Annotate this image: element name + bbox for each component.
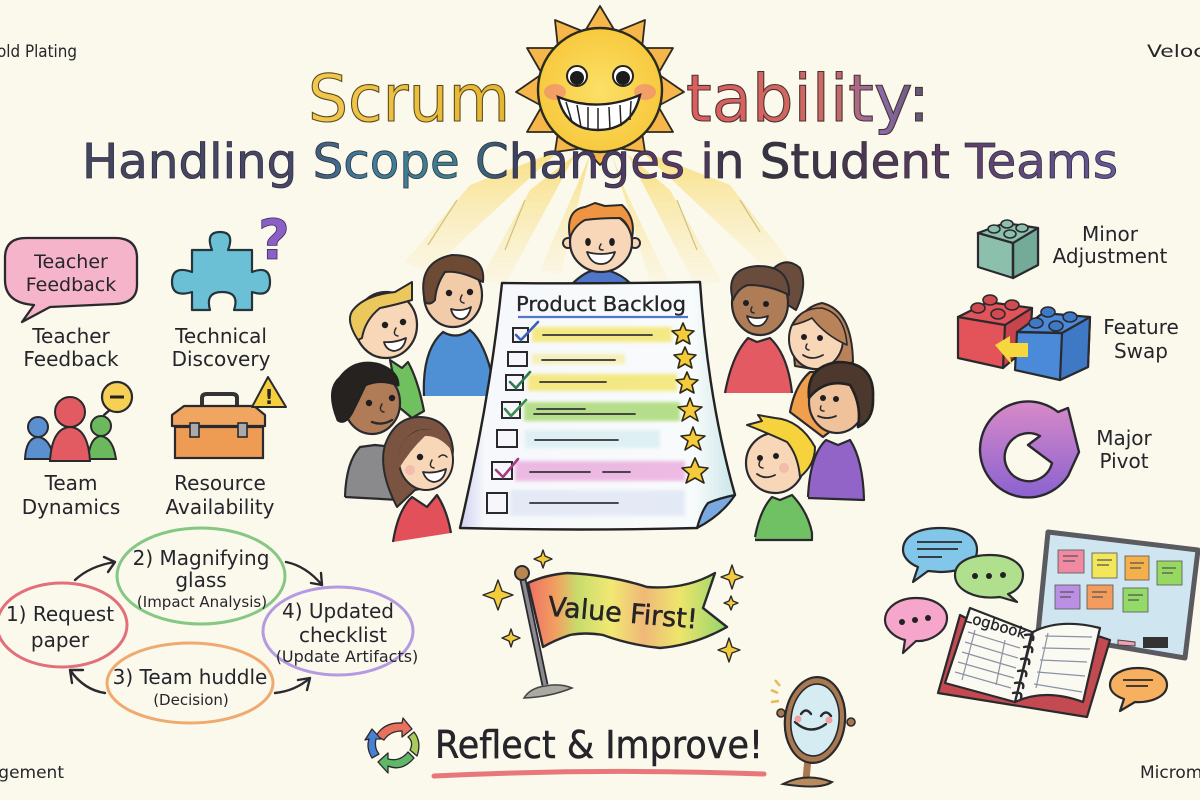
panel: product backlog paper — [460, 282, 735, 530]
icon: kanban board — [1038, 532, 1198, 658]
sun rays — [405, 150, 790, 285]
person: blond green shirt front — [746, 415, 815, 540]
icon: question mark: ? — [258, 208, 290, 272]
step 2: magnifying glass: (Impact Analysis) — [137, 593, 267, 611]
label: feature swap: Feature — [1103, 315, 1179, 339]
step 3: team huddle: (Decision) — [153, 691, 229, 709]
icon: toolbox — [172, 394, 265, 458]
icon: puzzle piece — [172, 232, 270, 310]
icon: warning triangle — [252, 377, 286, 409]
icon: orange speech bubble — [1110, 668, 1167, 711]
process cycle — [0, 528, 418, 723]
reflect and improve — [365, 718, 764, 776]
step 4: updated checklist: (Update Artifacts) — [276, 647, 418, 666]
step 4: updated checklist: checklist — [299, 623, 387, 647]
icon: feature swap blocks — [958, 295, 1090, 380]
backlog stars — [672, 323, 708, 483]
person: long hair red shirt — [383, 417, 453, 542]
icon: teacher feedback speech bubble — [5, 238, 137, 322]
step 3: team huddle: 3) Team huddle — [113, 665, 267, 689]
person: curly hair purple shirt — [808, 362, 873, 500]
icon: team dynamics people — [25, 382, 132, 461]
label: feature swap: Swap — [1114, 339, 1168, 363]
icon: major pivot arrow — [980, 401, 1079, 497]
label: major pivot: Pivot — [1099, 449, 1149, 473]
icon: logbook — [938, 608, 1110, 717]
sparkles — [483, 550, 743, 662]
label: technical discovery — [172, 324, 271, 371]
label: team dynamics: Dynamics — [22, 495, 120, 519]
backlog checkmarks — [496, 322, 538, 477]
flag pole — [522, 575, 545, 685]
title: first line: tability: — [686, 62, 930, 137]
step 3: team huddle — [107, 643, 273, 723]
icon: recycle arrows — [365, 718, 419, 773]
person: top centre — [563, 203, 640, 283]
people right group — [725, 262, 873, 540]
icon: logbook: Logbook — [962, 608, 1029, 643]
underline — [434, 771, 764, 776]
label: major pivot: Major — [1096, 426, 1153, 450]
corner label: management: gement — [0, 763, 64, 783]
backlog row highlights — [510, 327, 685, 516]
label: team dynamics — [22, 471, 120, 519]
flag slogan: Value First! — [547, 592, 699, 636]
step 4: updated checklist — [263, 587, 418, 675]
step 1: request paper: paper — [31, 628, 90, 652]
arrow: 2 to 4 — [286, 562, 322, 585]
arrow: 3 to 1 — [70, 670, 105, 693]
flag banner — [528, 573, 727, 648]
label: technical discovery: Technical — [174, 324, 267, 348]
label: resource availability: Availability — [165, 495, 275, 519]
label: resource availability — [165, 471, 275, 519]
icon: green speech bubble — [955, 555, 1023, 602]
label: teacher feedback: Teacher — [31, 324, 111, 348]
title: first line: Scrum — [308, 62, 510, 137]
person: ponytail red shirt — [725, 262, 803, 393]
icon: teacher feedback speech bubble: Feedback — [26, 274, 116, 296]
label: minor adjustment: Minor — [1082, 222, 1139, 246]
backlog checkboxes — [487, 328, 528, 513]
person: blond green shirt — [350, 282, 424, 418]
icon: sun — [516, 6, 684, 165]
step 2: magnifying glass: glass — [175, 568, 227, 592]
title: first line — [308, 62, 930, 137]
icon: blue speech bubble — [903, 528, 977, 582]
panel: change sizes — [958, 220, 1179, 497]
label: team dynamics: Team — [44, 471, 97, 495]
label: teacher feedback — [23, 324, 119, 371]
arrow: 3 to 4 — [275, 678, 310, 693]
people left group — [332, 255, 496, 542]
label: feature swap — [1103, 315, 1179, 363]
backlog heading: Product Backlog — [516, 292, 686, 316]
person: brown hair orange shirt — [789, 303, 853, 437]
panel: sources of change — [5, 208, 290, 519]
icon: minor adjustment block — [978, 220, 1038, 278]
icon: warning triangle: ! — [264, 385, 274, 409]
step 4: updated checklist: 4) Updated — [282, 599, 394, 623]
step 2: magnifying glass — [117, 528, 285, 624]
step 2: magnifying glass: 2) Magnifying — [133, 546, 269, 570]
title: subtitle line: Handling Scope Changes in Student Teams — [82, 134, 1118, 190]
step 1: request paper: 1) Request — [6, 602, 114, 626]
person: brown hair blue shirt — [423, 255, 496, 396]
label: teacher feedback: Feedback — [23, 347, 119, 371]
icon: mirror — [771, 674, 855, 787]
icon: teacher feedback speech bubble: Teacher — [33, 251, 108, 273]
label: minor adjustment: Adjustment — [1053, 244, 1168, 268]
label: resource availability: Resource — [174, 471, 266, 495]
step 1: request paper — [0, 583, 127, 667]
slogan: Reflect & Improve! — [435, 723, 763, 767]
label: major pivot — [1096, 426, 1153, 473]
label: technical discovery: Discovery — [172, 347, 271, 371]
arrow: 1 to 2 — [75, 557, 115, 580]
icon: pink speech bubble — [885, 598, 947, 653]
panel: communication tools — [885, 528, 1198, 717]
person: curly dark hair grey shirt — [332, 363, 400, 500]
label: minor adjustment — [1053, 222, 1168, 268]
backlog text lines — [530, 335, 652, 503]
value first flag — [483, 550, 743, 698]
